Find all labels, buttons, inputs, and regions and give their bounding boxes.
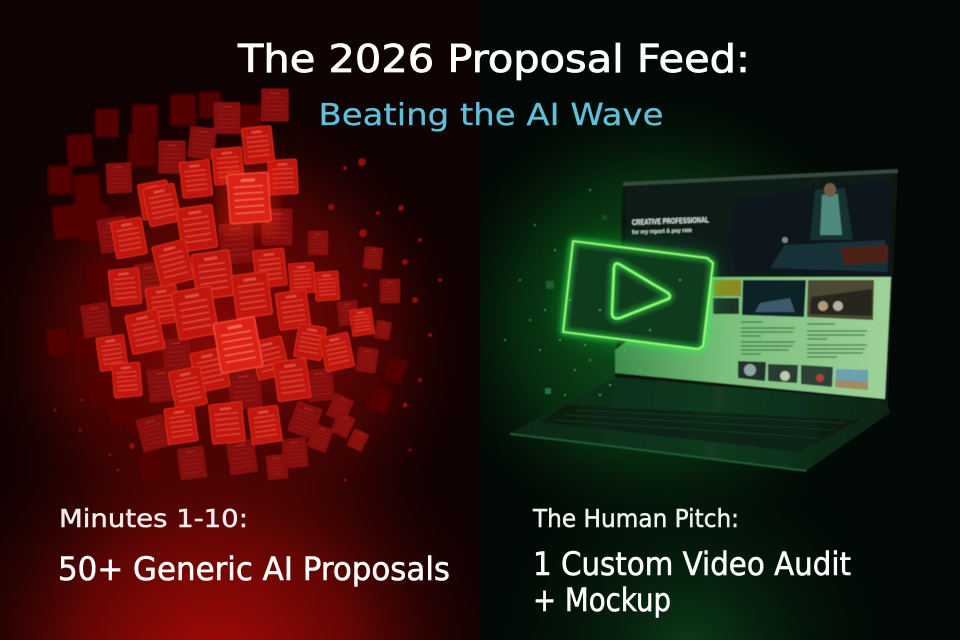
article text lines bbox=[741, 322, 867, 357]
icon: play triangle bbox=[612, 263, 670, 318]
subtitle: Beating the AI Wave bbox=[318, 98, 664, 133]
light content area bbox=[615, 277, 891, 399]
laptop screen bbox=[615, 169, 898, 401]
right caption headline: 1 Custom Video Audit bbox=[533, 545, 851, 583]
right caption label: The Human Pitch: bbox=[532, 504, 739, 533]
video card with play icon bbox=[563, 241, 713, 349]
right caption headline: + Mockup bbox=[533, 581, 671, 619]
left caption label: Minutes 1-10: bbox=[59, 504, 248, 533]
title: The 2026 Proposal Feed: bbox=[237, 37, 750, 81]
hero heading: CREATIVE PROFESSIONAL bbox=[632, 215, 709, 227]
laptop base and keyboard bbox=[510, 377, 890, 472]
green particles bbox=[504, 189, 681, 396]
left caption headline: 50+ Generic AI Proposals bbox=[58, 550, 450, 588]
thumbnails bbox=[713, 280, 874, 390]
faint background documents bbox=[45, 92, 408, 480]
right caption headline bbox=[533, 545, 851, 619]
mid documents bbox=[96, 126, 375, 445]
panel: laptop with video overlay bbox=[504, 169, 898, 472]
hero subheading: for my report & pay rate bbox=[632, 228, 693, 236]
panel: red proposal cloud bbox=[45, 89, 442, 482]
red particles bbox=[54, 158, 442, 482]
dim documents bbox=[80, 89, 400, 480]
bright front documents bbox=[213, 165, 278, 373]
hero photo bbox=[725, 178, 892, 276]
